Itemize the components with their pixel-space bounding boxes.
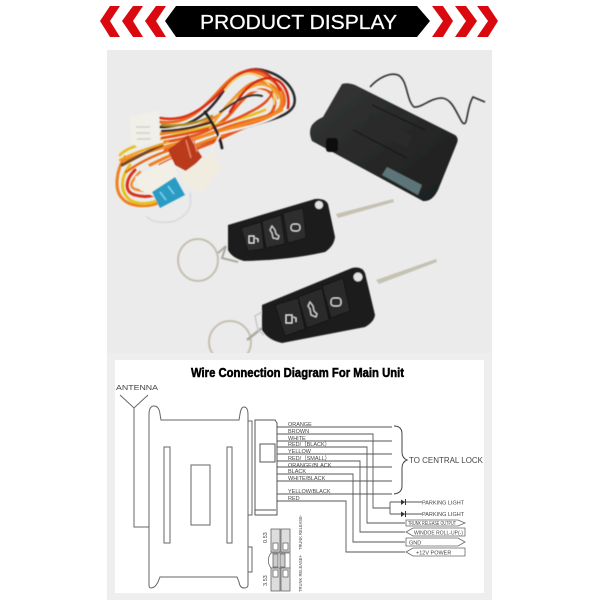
key button glyphs: [249, 224, 300, 243]
wire colour labels: YELLOW/BLACK: [288, 489, 331, 495]
right red chevrons: [432, 6, 498, 37]
wire colour labels: YELLOW: [288, 449, 312, 455]
wire colour labels: RED: [288, 496, 300, 502]
banner: product display: [100, 6, 498, 37]
wire colour labels: ORANGE/BLACK: [288, 463, 332, 469]
car key remote: lower: [209, 259, 437, 363]
key ring: [178, 239, 218, 281]
left red chevrons: [100, 6, 166, 37]
wiring harness: [117, 69, 295, 222]
key fob hole: [354, 272, 362, 282]
key body: [228, 199, 335, 261]
diagram title: Wire Connection Diagram For Main Unit: [191, 366, 405, 380]
antenna label: ANTENNA: [116, 383, 158, 392]
wire colour labels: RED/（SMALL）: [288, 455, 330, 462]
parking light diodes: [401, 499, 406, 517]
key blade: [336, 199, 394, 218]
white connector lower left: [135, 159, 178, 197]
trunk release labels: TRUNK RELEASE+: [298, 555, 303, 592]
black title plate: [165, 6, 430, 37]
output label boxes: [406, 520, 465, 556]
white connector top: [133, 116, 161, 148]
module raised panel: [365, 115, 412, 148]
main unit connector block: [255, 420, 277, 515]
key button glyphs: [286, 298, 341, 323]
wire lines: [277, 427, 422, 552]
to central lock label: TO CENTRAL LOCK: [409, 455, 483, 465]
central lock brace: [394, 426, 407, 494]
pinout size label bottom: 3.53: [263, 575, 269, 586]
panel: wire connection diagram: [107, 353, 492, 600]
main unit outline: [149, 406, 252, 588]
module pin connector: [382, 167, 422, 195]
control module antenna wire: [370, 74, 485, 124]
antenna symbol: [120, 395, 149, 527]
pinout size label top: 0.53: [263, 532, 269, 543]
wire colour labels: ORANGE: [288, 422, 312, 428]
key fob hole: [315, 201, 323, 209]
output label text: +12V POWER: [416, 550, 451, 556]
output label text: TRUNK RELEASE OUTPUT: [408, 521, 456, 527]
key buttons: [241, 208, 306, 251]
wire colour labels: WHITE/BLACK: [288, 476, 326, 482]
output label text: GND: [409, 540, 421, 546]
wire colour labels: BROWN: [288, 429, 309, 435]
key blade: [376, 259, 437, 284]
banner heading: PRODUCT DISPLAY: [200, 11, 397, 34]
wire colour labels: BLACK: [288, 469, 306, 475]
output label text: WINDOE ROLL-UP(-): [414, 530, 463, 536]
car key remote: upper: [178, 199, 394, 281]
blue fuse: [152, 177, 185, 208]
trunk release labels: TRUNK RELEASE-: [298, 515, 303, 550]
parking light labels: PARKING LIGHT: [422, 500, 465, 506]
output label text: [408, 521, 463, 556]
key ring: [208, 320, 252, 353]
key buttons: [275, 278, 350, 336]
red fuse: [168, 135, 202, 172]
wire colour labels: WHITE: [288, 436, 306, 442]
trunk release labels: [298, 515, 303, 592]
white connector right: [180, 152, 222, 193]
control module: [310, 83, 458, 201]
wire colour labels: [288, 422, 332, 502]
panel: product photo: [107, 50, 492, 363]
connector pinout: [268, 529, 290, 591]
module socket: [326, 138, 338, 152]
parking light labels: PARKING LIGHT: [422, 512, 465, 518]
wire colour labels: RED/（BLACK）: [288, 441, 330, 448]
key body: [262, 268, 375, 343]
parking light labels: [422, 500, 465, 518]
